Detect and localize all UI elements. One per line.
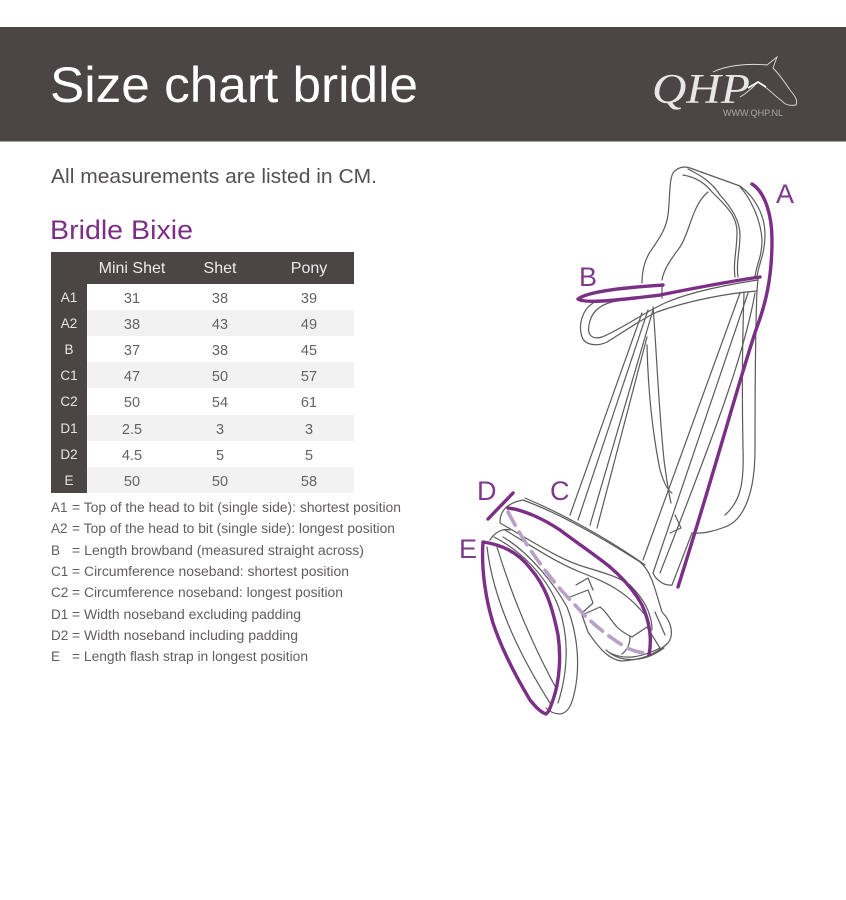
measurement legend	[51, 500, 401, 664]
size table: 4.5	[122, 448, 142, 464]
measurement legend: = Top of the head to bit (single side): shortest position	[72, 500, 401, 515]
title: Size chart bridle	[50, 57, 418, 113]
labels A B C D E: D	[477, 476, 496, 506]
measurement legend: D1	[51, 607, 68, 622]
measurement legend: A1	[51, 500, 68, 515]
size table: 61	[301, 395, 317, 411]
header banner	[0, 27, 846, 142]
size table: D2	[60, 447, 78, 462]
measure line C dashed	[508, 512, 648, 653]
labels A B C D E: A	[776, 179, 794, 209]
measurement legend: C2	[51, 585, 68, 600]
labels A B C D E: E	[459, 534, 477, 564]
size table: 5	[216, 448, 224, 464]
measurement legend: = Circumference noseband: longest position	[72, 585, 343, 600]
size table: 3	[216, 422, 224, 438]
size table: E	[64, 473, 74, 488]
measurement legend: = Width noseband including padding	[72, 628, 298, 643]
size table: 38	[212, 343, 228, 359]
measurement legend: = Circumference noseband: shortest position	[72, 564, 349, 579]
measurement legend: C1	[51, 564, 68, 579]
measurement legend: E	[51, 649, 60, 664]
size table: 43	[212, 317, 228, 333]
size table: B	[64, 342, 74, 357]
logo: QHP with horse head	[652, 57, 797, 119]
size table	[51, 252, 354, 493]
size table: 39	[301, 291, 317, 307]
measurement legend: D2	[51, 628, 68, 643]
labels A B C D E	[459, 179, 794, 564]
flash strap	[487, 529, 578, 714]
size table: 57	[301, 369, 317, 385]
size table: 5	[305, 448, 313, 464]
size table: 37	[124, 343, 140, 359]
crown piece	[642, 167, 765, 283]
buckle and padding	[570, 578, 665, 654]
size table: 50	[212, 474, 228, 490]
size table: 2.5	[122, 422, 142, 438]
measure line A	[678, 184, 772, 587]
browband	[580, 279, 758, 345]
size table: 58	[301, 474, 317, 490]
bridle illustration	[459, 167, 794, 714]
measure line C	[508, 508, 650, 655]
measurement legend: = Length flash strap in longest position	[72, 649, 308, 664]
size table: 31	[124, 291, 140, 307]
size table: D1	[60, 421, 78, 436]
labels A B C D E: C	[550, 476, 570, 506]
measurement legend: = Width noseband excluding padding	[72, 607, 301, 622]
size table: 47	[124, 369, 140, 385]
size table: C1	[60, 368, 78, 383]
measurement legend: = Top of the head to bit (single side): longest position	[72, 521, 395, 536]
measurement legend: B	[51, 543, 60, 558]
size table: 50	[212, 369, 228, 385]
size table: 45	[301, 343, 317, 359]
size table: A2	[61, 316, 77, 331]
size table: Shet	[204, 260, 237, 277]
measure line D	[488, 493, 513, 519]
measure line B	[578, 277, 760, 301]
section heading: Bridle Bixie	[50, 215, 193, 245]
size table: 38	[212, 291, 228, 307]
size table: A1	[61, 290, 77, 305]
logo: QHP with horse head: QHP	[652, 67, 750, 113]
size table: 49	[301, 317, 317, 333]
size table: Pony	[291, 260, 327, 277]
measure line E	[483, 542, 560, 714]
size table: 50	[124, 474, 140, 490]
size table: C2	[60, 394, 78, 409]
size table: 38	[124, 317, 140, 333]
intro text: All measurements are listed in CM.	[51, 165, 377, 188]
size table: Mini Shet	[99, 260, 166, 277]
noseband	[500, 498, 671, 661]
size table: 3	[305, 422, 313, 438]
labels A B C D E: B	[579, 262, 597, 292]
measurement legend: = Length browband (measured straight across)	[72, 543, 364, 558]
logo: QHP with horse head: WWW.QHP.NL	[723, 108, 783, 119]
size table: 50	[124, 395, 140, 411]
cheek straps	[570, 290, 757, 585]
measurement legend: A2	[51, 521, 68, 536]
size table: 54	[212, 395, 228, 411]
